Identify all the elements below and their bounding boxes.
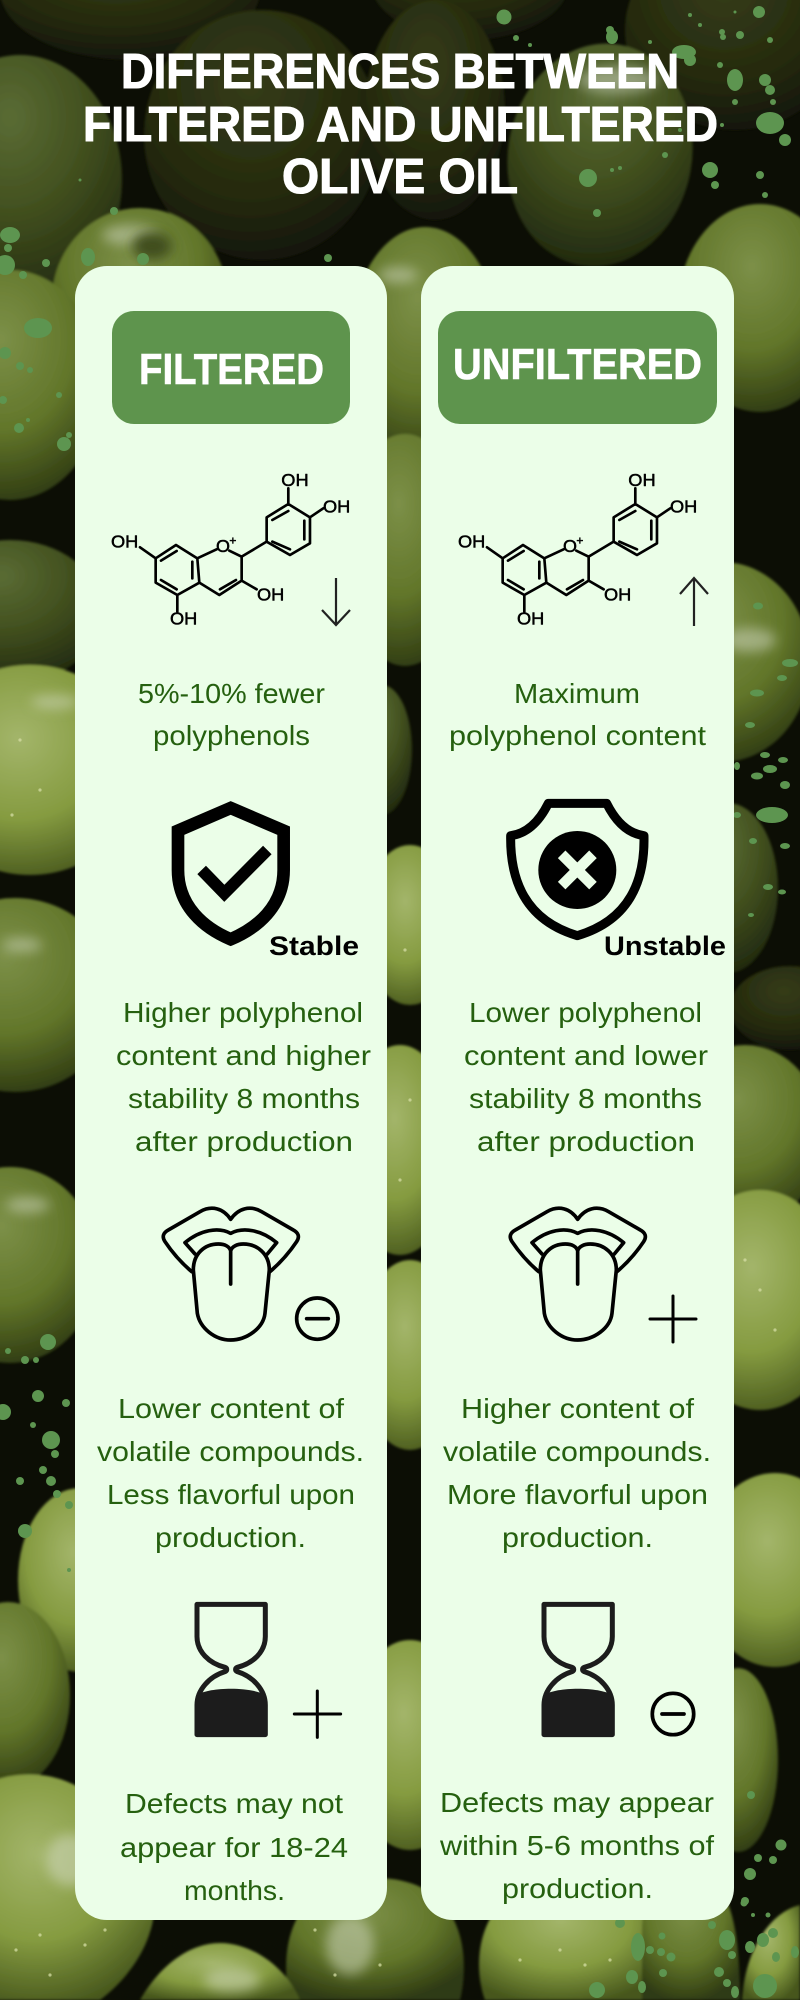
arrow: down bbox=[322, 578, 350, 625]
icon: polyphenol molecule: + bbox=[576, 534, 583, 548]
icon: polyphenol molecule bbox=[458, 470, 697, 628]
text: defects: months. bbox=[184, 1875, 285, 1906]
text: stability: after production bbox=[477, 1126, 695, 1157]
icon: stable shield bbox=[178, 808, 284, 939]
icon: polyphenol molecule: OH bbox=[111, 531, 138, 551]
heading: filtered: FILTERED bbox=[139, 345, 324, 394]
icon: polyphenol molecule: OH bbox=[170, 608, 197, 628]
icon: polyphenol molecule: OH bbox=[281, 470, 309, 490]
icon: polyphenol molecule: OH bbox=[517, 608, 544, 628]
heading: unfiltered bbox=[438, 311, 717, 424]
text: volatile compounds: production. bbox=[155, 1522, 306, 1553]
text: defects: appear for 18-24 bbox=[120, 1832, 348, 1863]
text: volatile compounds: Lower content of bbox=[118, 1393, 344, 1424]
text: volatile compounds: volatile compounds. bbox=[97, 1436, 364, 1467]
label: unstable: Unstable bbox=[604, 931, 726, 961]
text: defects bbox=[120, 1788, 348, 1906]
icon: hourglass with minus bbox=[544, 1604, 694, 1735]
icon: polyphenol molecule: O bbox=[216, 536, 230, 556]
icon: polyphenol molecule bbox=[111, 470, 350, 628]
heading: unfiltered: UNFILTERED bbox=[453, 340, 702, 389]
label: stable: Stable bbox=[269, 931, 359, 961]
text: volatile compounds bbox=[443, 1393, 711, 1553]
icon: polyphenol molecule: OH bbox=[670, 496, 697, 516]
text: polyphenols: Maximum bbox=[514, 678, 640, 709]
text: defects: production. bbox=[502, 1873, 653, 1904]
text: stability: Higher polyphenol bbox=[123, 997, 363, 1028]
text: defects: within 5-6 months of bbox=[439, 1830, 714, 1861]
text: polyphenols: 5%-10% fewer bbox=[138, 678, 325, 709]
icon: polyphenol molecule: OH bbox=[604, 585, 631, 605]
text: stability: stability 8 months bbox=[469, 1083, 702, 1114]
text: volatile compounds: volatile compounds. bbox=[443, 1436, 711, 1467]
icon: hourglass with plus bbox=[197, 1604, 341, 1737]
text: polyphenols: polyphenol content bbox=[449, 720, 706, 751]
text: stability bbox=[116, 997, 371, 1157]
icon: unstable shield bbox=[511, 803, 644, 936]
icon: tongue with plus bbox=[510, 1208, 696, 1342]
text: stability: after production bbox=[135, 1126, 353, 1157]
text: stability: Lower polyphenol bbox=[469, 997, 702, 1028]
title: FILTERED AND UNFILTERED bbox=[83, 98, 718, 152]
icon: polyphenol molecule: OH bbox=[257, 585, 284, 605]
text: stability: content and higher bbox=[116, 1040, 371, 1071]
text: stability: content and lower bbox=[464, 1040, 708, 1071]
title bbox=[83, 45, 718, 204]
text: polyphenols: polyphenols bbox=[153, 720, 310, 751]
arrow: up bbox=[680, 578, 708, 626]
text: stability: stability 8 months bbox=[128, 1083, 360, 1114]
icon: polyphenol molecule: + bbox=[229, 534, 236, 548]
text: stability bbox=[464, 997, 708, 1157]
text: polyphenols bbox=[138, 678, 325, 751]
title: DIFFERENCES BETWEEN bbox=[121, 45, 679, 99]
text: volatile compounds: Higher content of bbox=[461, 1393, 694, 1424]
icon: polyphenol molecule: OH bbox=[323, 496, 350, 516]
text: defects bbox=[439, 1787, 714, 1904]
heading: filtered bbox=[112, 311, 350, 424]
text: polyphenols bbox=[449, 678, 706, 751]
text: volatile compounds: production. bbox=[502, 1522, 653, 1553]
icon: tongue with minus bbox=[163, 1208, 338, 1340]
panel: unfiltered bbox=[421, 266, 734, 1920]
text: defects: Defects may appear bbox=[440, 1787, 714, 1818]
text: defects: Defects may not bbox=[125, 1788, 343, 1819]
icon: polyphenol molecule: OH bbox=[628, 470, 656, 490]
icon: polyphenol molecule: O bbox=[563, 536, 577, 556]
title: OLIVE OIL bbox=[282, 150, 518, 204]
text: volatile compounds: More flavorful upon bbox=[447, 1479, 708, 1510]
icon: polyphenol molecule: OH bbox=[458, 531, 485, 551]
panel: filtered bbox=[75, 266, 387, 1920]
text: volatile compounds: Less flavorful upon bbox=[107, 1479, 355, 1510]
text: volatile compounds bbox=[97, 1393, 364, 1553]
